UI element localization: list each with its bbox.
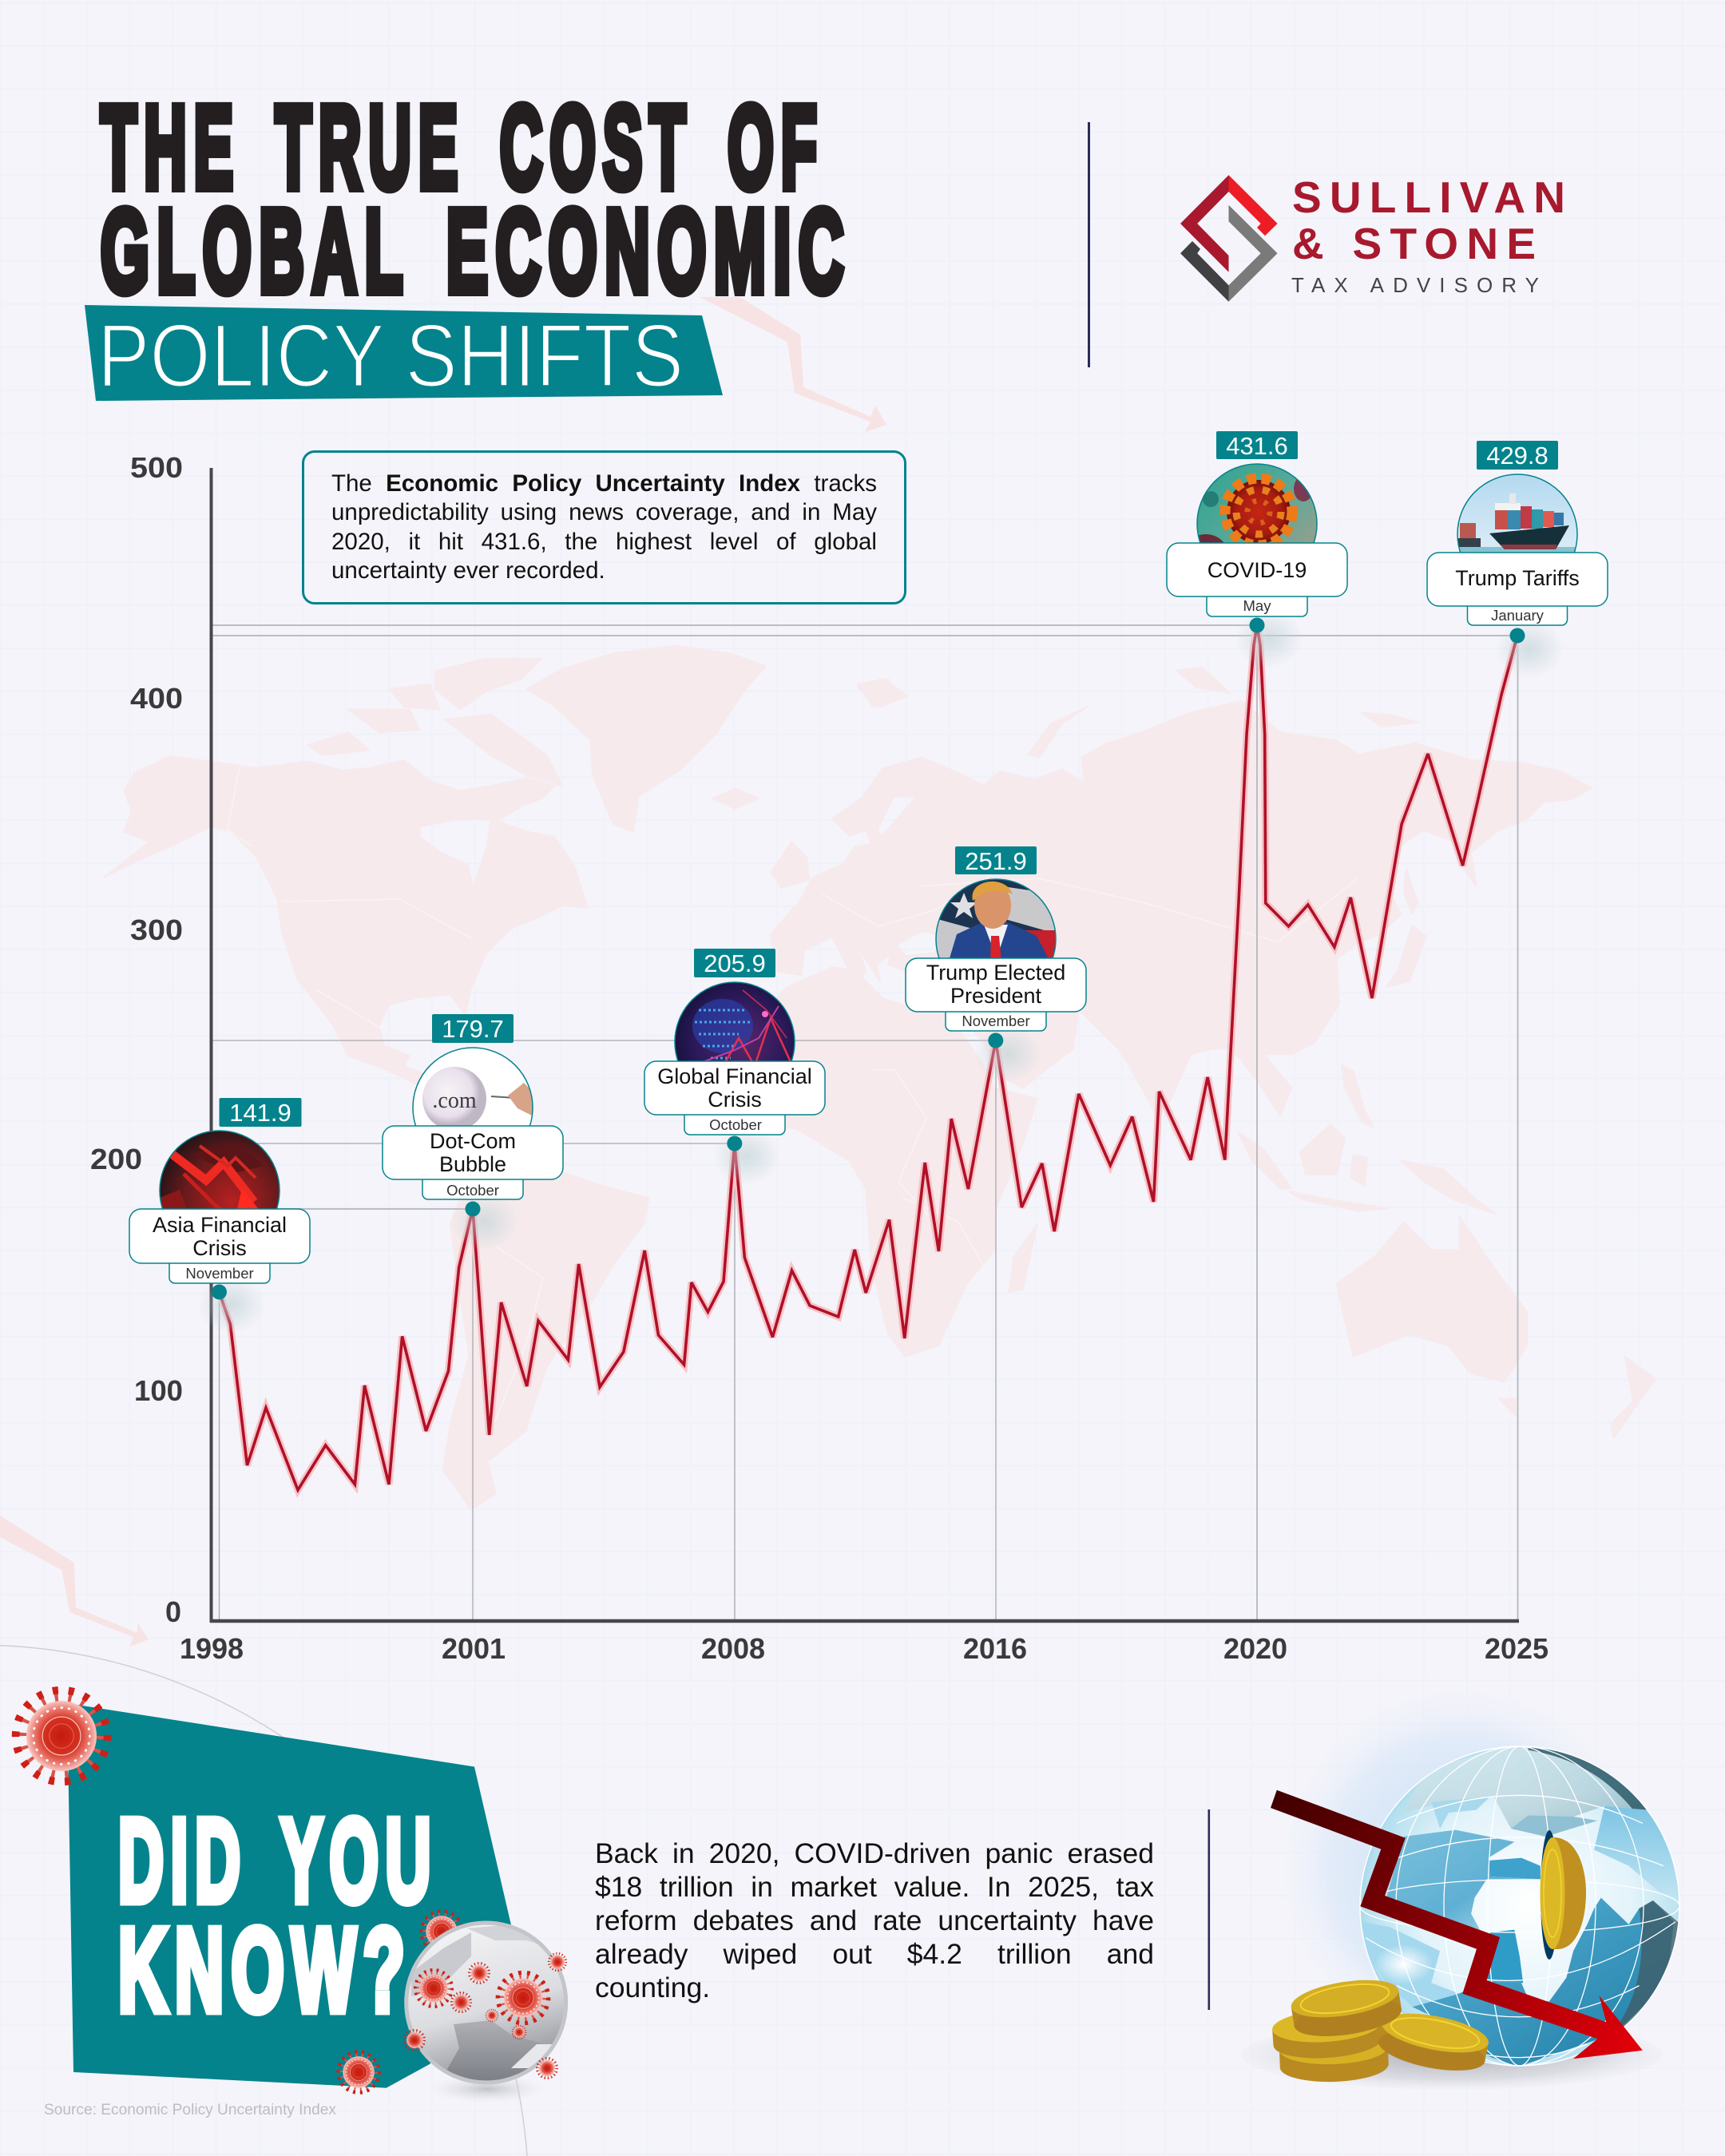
- line series glow: [219, 625, 1517, 1490]
- month tag: October: [446, 1182, 499, 1199]
- callout: index explanation: The Economic Policy Uncertainty Index tracks: [331, 470, 877, 497]
- month tag: [1207, 593, 1307, 616]
- y axis labels: 300: [130, 914, 183, 946]
- value badge: 179.7: [442, 1015, 504, 1043]
- logo wordmark: & STONE: [1292, 219, 1536, 268]
- month tag: [169, 1260, 270, 1283]
- divider: [1208, 1809, 1210, 2010]
- logo wordmark: [1291, 172, 1565, 297]
- world map background: [104, 646, 1656, 1509]
- event label: Crisis: [192, 1236, 247, 1260]
- y axis labels: 500: [130, 451, 183, 484]
- event label: [906, 958, 1086, 1012]
- chart: economic policy uncertainty index: [90, 431, 1608, 1665]
- text block: did you know fact: already wiped out $4.2 trillion and: [595, 1938, 1154, 1970]
- logo wordmark: SULLIVAN: [1292, 172, 1565, 222]
- icon: portrait with flag: [934, 878, 1058, 998]
- icon: digital globe chart: [676, 982, 794, 1060]
- line series: [219, 625, 1517, 1490]
- month tag: October: [709, 1116, 762, 1133]
- event label: COVID-19: [1208, 558, 1307, 582]
- value badge: 429.8: [1486, 442, 1549, 470]
- value badge: 205.9: [704, 949, 766, 977]
- icon: .com bubble: [414, 1048, 532, 1126]
- event label: President: [950, 984, 1042, 1008]
- coin stack: [1271, 1974, 1492, 2083]
- month tag: [946, 1008, 1046, 1031]
- logo: Sullivan & Stone: [1180, 172, 1565, 302]
- source note: Source: Economic Policy Uncertainty Index: [44, 2101, 336, 2118]
- event label: [644, 1061, 825, 1115]
- month tag: November: [962, 1013, 1030, 1029]
- event label: [1167, 543, 1347, 596]
- decorative faint arrow: top: [700, 297, 886, 432]
- icon: large virus: [16, 1690, 107, 1781]
- event label: Trump Tariffs: [1455, 566, 1580, 590]
- y axis labels: 400: [130, 682, 183, 715]
- falling arrow: [1271, 1790, 1643, 2059]
- event label: [1427, 553, 1608, 606]
- icon: globe with viruses: [404, 1921, 568, 2103]
- axes: [210, 468, 1519, 1623]
- header divider: [1088, 122, 1090, 367]
- event label: [129, 1209, 310, 1263]
- x axis labels: 2025: [1485, 1632, 1549, 1665]
- month tag: May: [1243, 597, 1271, 614]
- callout: index explanation: unpredictability using news coverage, and in May: [331, 499, 877, 525]
- globe halo: [1274, 1681, 1649, 2056]
- ground shadow: [1241, 2019, 1663, 2090]
- event label: Asia Financial: [153, 1213, 287, 1237]
- globe: [1360, 1743, 1702, 2067]
- title line 1: THE TRUE COST OF: [101, 82, 824, 213]
- x axis labels: 2020: [1223, 1632, 1287, 1665]
- event: Trump Tariffs: [1427, 441, 1608, 678]
- coin in globe: [1540, 1830, 1586, 1960]
- text block: did you know fact: Back in 2020, COVID-driven panic erased: [595, 1837, 1154, 1869]
- value badge: 251.9: [965, 847, 1027, 875]
- icon: virus behind globe: [421, 1911, 462, 1952]
- title line 2: GLOBAL ECONOMIC: [101, 186, 851, 317]
- month tag: [684, 1112, 785, 1135]
- icon: .com bubble: .com: [432, 1088, 477, 1113]
- title banner: POLICY SHIFTS: [97, 306, 684, 406]
- value badge: 141.9: [229, 1099, 291, 1127]
- x axis labels: 1998: [180, 1632, 244, 1665]
- panel: did you know: [16, 1690, 568, 2103]
- event: Dot-Com Bubble: [383, 1014, 563, 1250]
- callout: index explanation: [302, 450, 906, 604]
- event label: Global Financial: [657, 1064, 812, 1088]
- value badge: 431.6: [1226, 432, 1288, 460]
- decorative faint arrow: left: [0, 1516, 149, 1647]
- icon: bottom virus: [338, 2051, 379, 2093]
- event label: Dot-Com: [430, 1129, 516, 1153]
- heading: did you: DID YOU: [118, 1795, 438, 1927]
- y axis labels: 0: [165, 1595, 181, 1628]
- icon: red falling chart: [160, 1131, 280, 1209]
- month tag: January: [1491, 607, 1545, 624]
- heading: know: KNOW?: [118, 1904, 412, 2036]
- logo mark: [1180, 175, 1278, 302]
- month tag: [422, 1177, 523, 1199]
- text block: did you know fact: reform debates and rate uncertainty have: [595, 1904, 1154, 1936]
- icon: container ship: [1457, 474, 1577, 594]
- event: Trump Elected President: [906, 846, 1086, 1083]
- text block: did you know fact: counting.: [595, 1972, 710, 2003]
- x axis labels: [180, 1632, 1549, 1665]
- event label: Bubble: [439, 1152, 506, 1176]
- text block: did you know fact: [595, 1837, 1154, 2003]
- callout: index explanation: 2020, it hit 431.6, the highest level of global: [331, 529, 877, 555]
- illustration: globe, coins and falling arrow: [1241, 1681, 1702, 2090]
- month tag: [1468, 603, 1567, 625]
- y axis labels: [90, 451, 183, 1628]
- event: Global Financial Crisis: [644, 949, 825, 1185]
- callout: index explanation: uncertainty ever recorded.: [331, 557, 605, 584]
- y axis labels: 200: [90, 1143, 142, 1175]
- month tag: November: [185, 1265, 254, 1282]
- x axis labels: 2008: [701, 1632, 765, 1665]
- guide lines: [212, 625, 1517, 1621]
- title: [85, 82, 851, 406]
- event: COVID-19: [1167, 431, 1347, 668]
- event label: Crisis: [708, 1088, 762, 1112]
- y axis labels: 100: [134, 1374, 183, 1407]
- x axis labels: 2001: [442, 1632, 506, 1665]
- logo wordmark: TAX ADVISORY: [1291, 273, 1539, 297]
- event label: Trump Elected: [926, 961, 1065, 985]
- text block: did you know fact: $18 trillion in market value. In 2025, tax: [595, 1871, 1154, 1903]
- x axis labels: 2016: [963, 1632, 1027, 1665]
- event: Asia Financial Crisis: [129, 1098, 310, 1334]
- icon: coronavirus: [1184, 464, 1334, 584]
- decorative arc: [0, 1646, 527, 2156]
- event label: [383, 1126, 563, 1179]
